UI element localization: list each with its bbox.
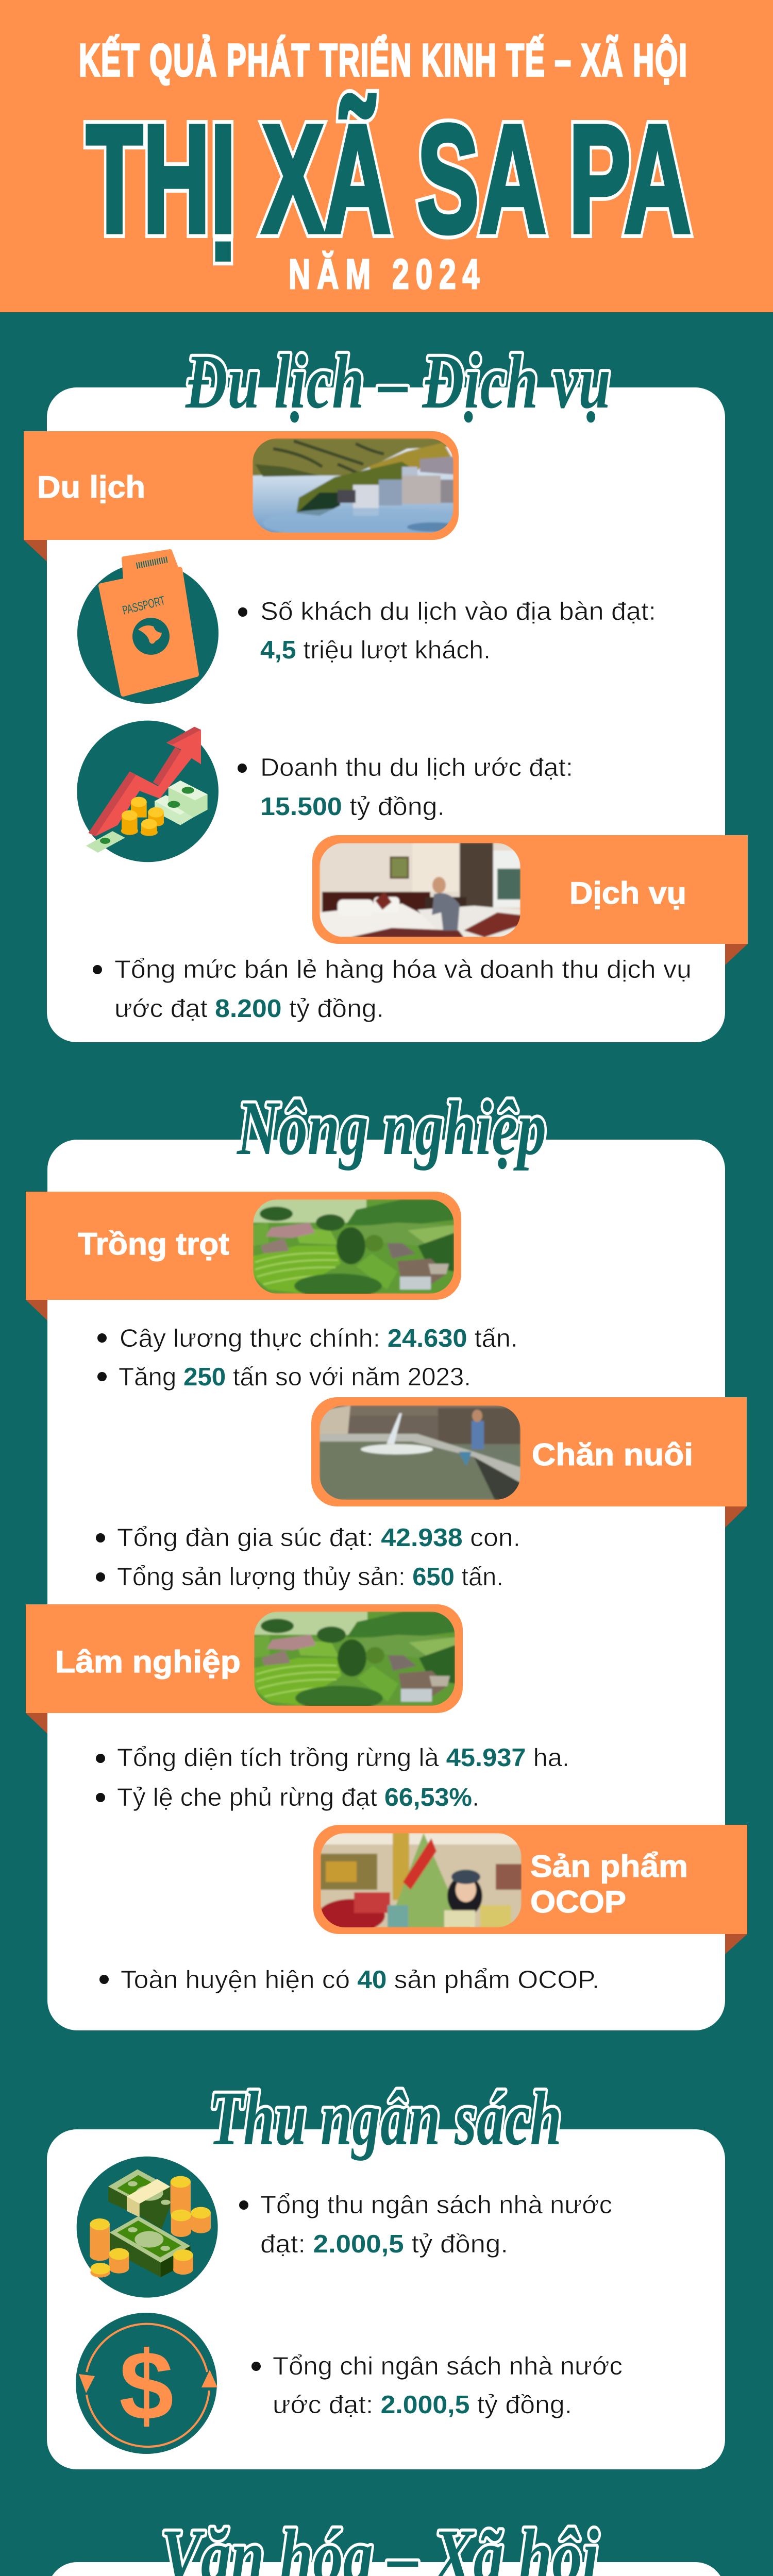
text: tổng mức bán lẻ: Tổng mức bán lẻ hàng hóa và doanh thu dịch vụ <box>114 956 692 984</box>
text: trồng trọt figures <box>97 1325 518 1391</box>
text: tổng thu ngân sách: Tổng thu ngân sách nhà nước <box>260 2191 612 2219</box>
icon: passport: PASSPORT <box>121 594 166 618</box>
icon: revenue growth <box>77 721 219 862</box>
ribbon: chăn nuôi: Chăn nuôi <box>532 1437 693 1472</box>
ribbon: du lịch: Du lịch <box>37 470 145 504</box>
text: tổng chi ngân sách <box>251 2352 623 2419</box>
ribbon: sản phẩm OCOP <box>313 1825 747 1954</box>
ribbon: lâm nghiệp: Lâm nghiệp <box>55 1645 241 1679</box>
text: tổng mức bán lẻ: ước đạt 8.200 tỷ đồng. <box>114 995 384 1023</box>
text: tổng mức bán lẻ <box>93 956 692 1023</box>
title year: NĂM 2024 <box>289 251 486 298</box>
text: số khách du lịch <box>238 598 656 664</box>
icon: budget spending: $ <box>119 2331 174 2441</box>
photo: fish pond <box>320 1405 520 1500</box>
ribbon: sản phẩm OCOP: Sản phẩm <box>530 1849 688 1884</box>
text: doanh thu du lịch: 15.500 tỷ đồng. <box>260 793 445 821</box>
text: số khách du lịch: 4,5 triệu lượt khách. <box>260 636 491 664</box>
photo: terraced fields <box>253 1199 454 1298</box>
ribbon: trồng trọt <box>26 1192 461 1320</box>
text: doanh thu du lịch <box>238 754 573 821</box>
photo: hotel room <box>320 843 520 937</box>
ribbon: dịch vụ: Dịch vụ <box>569 876 686 910</box>
text: tổng chi ngân sách: Tổng chi ngân sách nhà nước <box>273 2352 623 2380</box>
text: chăn nuôi figures: Tổng đàn gia súc đạt: 42.938 con. <box>117 1524 520 1552</box>
ribbon: lâm nghiệp <box>26 1604 463 1734</box>
ribbon: chăn nuôi <box>311 1397 747 1528</box>
ribbon: dịch vụ <box>312 835 748 965</box>
heading: thu ngân sách: Thu ngân sách <box>209 2076 562 2161</box>
text: số khách du lịch: Số khách du lịch vào địa bàn đạt: <box>260 598 656 625</box>
text: lâm nghiệp figures <box>96 1744 569 1811</box>
ribbon: trồng trọt: Trồng trọt <box>78 1227 229 1261</box>
text: trồng trọt figures: Tăng 250 tấn so với năm 2023. <box>119 1363 471 1391</box>
panel: nông nghiệp <box>26 1086 747 2030</box>
text: lâm nghiệp figures: Tỷ lệ che phủ rừng đạt 66,53%. <box>117 1784 479 1811</box>
text: tổng chi ngân sách: ước đạt: 2.000,5 tỷ đồng. <box>273 2391 572 2419</box>
text: OCOP: Toàn huyện hiện có 40 sản phẩm OCOP. <box>121 1966 599 1994</box>
panel: du lịch - dịch vụ <box>24 339 748 1042</box>
ribbon: du lịch <box>24 431 469 562</box>
ribbon: sản phẩm OCOP: OCOP <box>530 1885 626 1919</box>
panel: thu ngân sách <box>47 2076 725 2469</box>
text: chăn nuôi figures: Tổng sản lượng thủy sản: 650 tấn. <box>117 1563 503 1591</box>
icon: cash and coins <box>77 2157 218 2298</box>
icon: passport <box>77 551 219 704</box>
heading: nông nghiệp: Nông nghiệp <box>237 1086 546 1171</box>
photo: forest valley <box>254 1612 455 1710</box>
text: tổng thu ngân sách <box>239 2191 612 2258</box>
heading: du lịch - dịch vụ: Đu lịch – Địch vụ <box>185 339 611 425</box>
text: lâm nghiệp figures: Tổng diện tích trồng rừng là 45.937 ha. <box>117 1744 569 1772</box>
text: chăn nuôi figures <box>96 1524 520 1591</box>
icon: budget spending <box>76 2313 217 2454</box>
photo: mountain town in clouds <box>253 438 453 533</box>
text: trồng trọt figures: Cây lương thực chính: 24.630 tấn. <box>120 1325 518 1352</box>
photo: OCOP display <box>318 1833 522 1932</box>
text: doanh thu du lịch: Doanh thu du lịch ước đạt: <box>260 754 573 782</box>
text: tổng thu ngân sách: đạt: 2.000,5 tỷ đồng. <box>260 2230 508 2258</box>
